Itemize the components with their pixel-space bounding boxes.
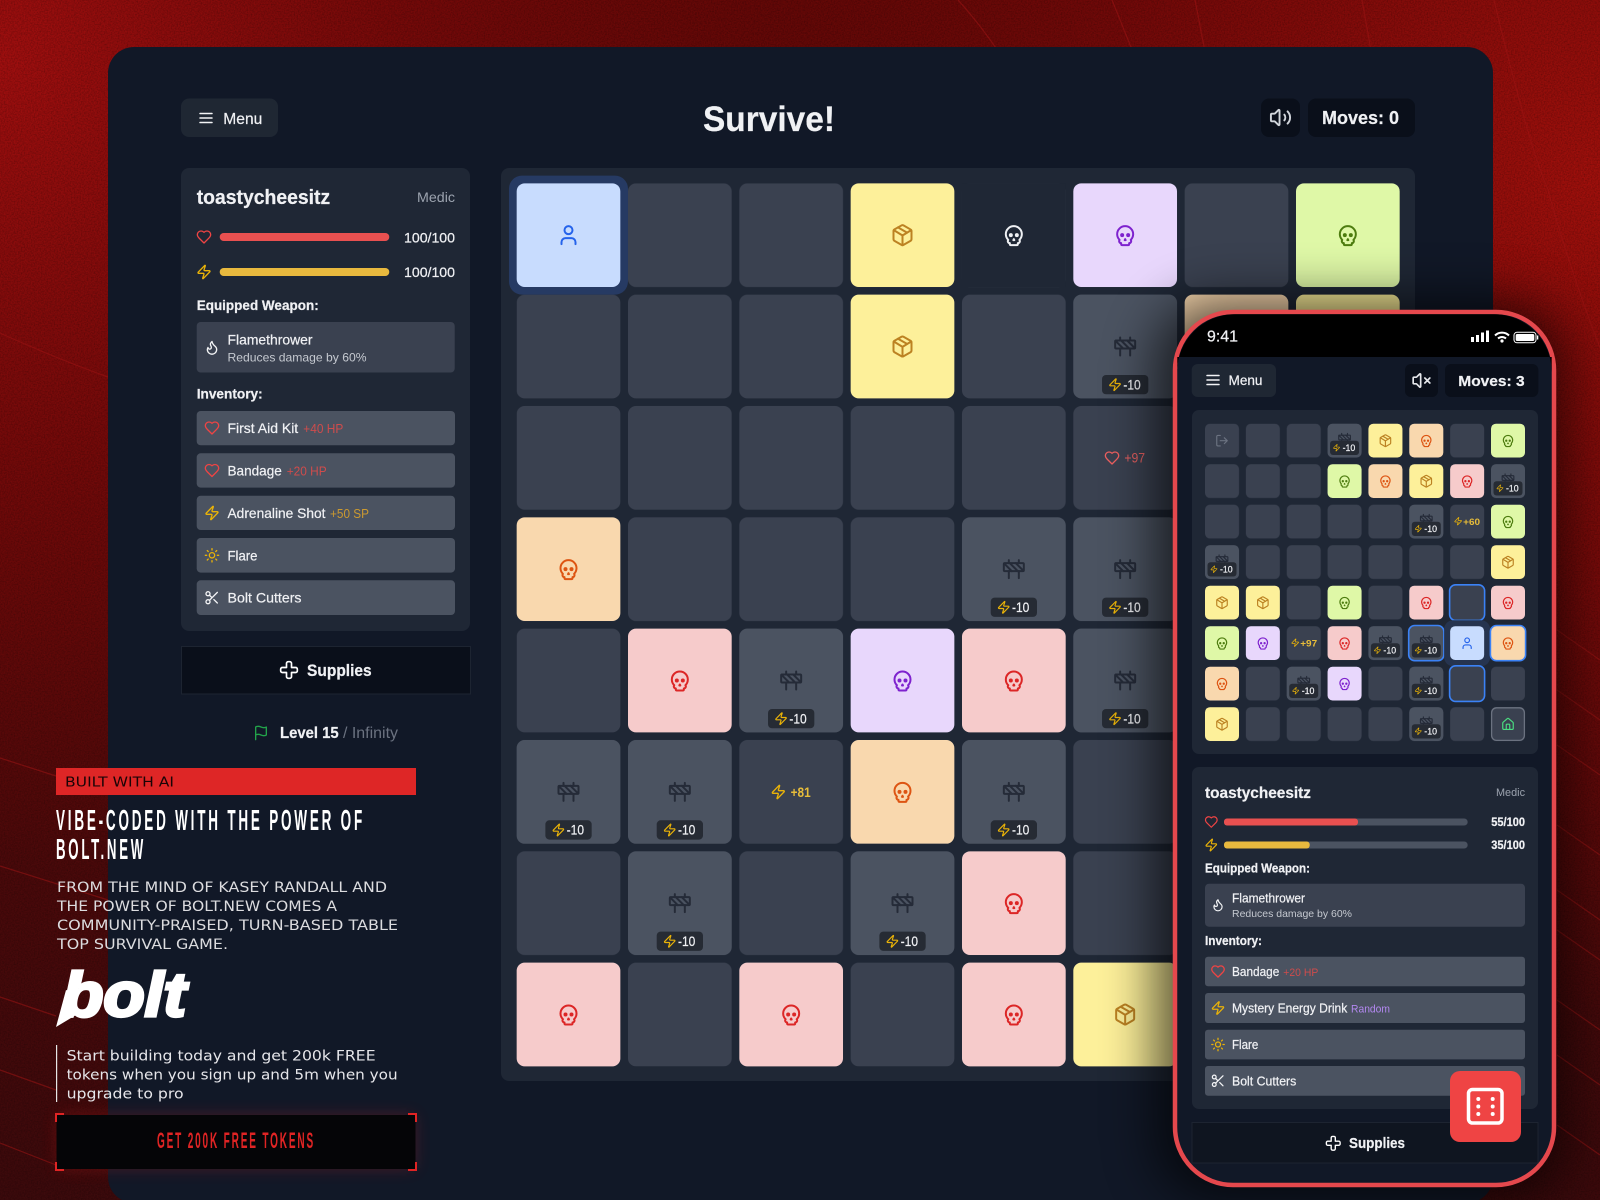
barrier tile: -10 xyxy=(1012,822,1029,838)
inventory item: adrenaline shot: Adrenaline Shot xyxy=(228,505,326,521)
barrier tile: -10 xyxy=(1012,599,1029,615)
phone moves counter: Moves: 3 xyxy=(1458,373,1525,390)
promo offer text xyxy=(56,1045,398,1103)
barrier tile: -10 xyxy=(678,933,695,949)
panel: game board xyxy=(501,168,1415,1081)
empty tiles grid xyxy=(517,183,1400,1066)
barrier tile: -10 xyxy=(901,933,918,949)
barrier tile xyxy=(517,740,620,844)
orange skull tile with move outline xyxy=(1490,626,1526,661)
inventory item: bandage: Bandage xyxy=(228,462,282,478)
bolt logo: bolt xyxy=(62,961,189,1030)
phone moves counter xyxy=(1445,364,1538,397)
phone weapon heading: Equipped Weapon: xyxy=(1205,862,1310,876)
purple skull tile xyxy=(851,629,954,732)
menu button xyxy=(181,98,278,137)
phone supplies button xyxy=(1192,1122,1538,1163)
purple skull tile xyxy=(1328,667,1362,700)
orange skull tile xyxy=(1185,295,1288,398)
phone weapon card xyxy=(1205,884,1525,927)
energy pickup tile: +97 xyxy=(1300,639,1317,649)
orange skull tile xyxy=(1368,464,1402,498)
health bar xyxy=(197,230,455,246)
phone item: mystery energy drink xyxy=(1205,993,1525,1023)
barrier tile xyxy=(1287,667,1321,700)
phone energy bar xyxy=(1206,839,1525,852)
energy pickup tile: +60 xyxy=(1463,517,1480,527)
inventory item: bolt cutters: Bolt Cutters xyxy=(228,590,302,606)
phone supplies button: Supplies xyxy=(1349,1136,1405,1152)
barrier tile: -10 xyxy=(1424,524,1437,535)
panel: player stats sidebar xyxy=(181,168,470,631)
phone status bar: 9:41 xyxy=(1207,329,1238,346)
inventory item: first aid kit: First Aid Kit xyxy=(228,420,298,436)
phone player name: toastycheesitz xyxy=(1205,785,1311,802)
crate tile xyxy=(1491,545,1525,579)
red skull tile xyxy=(517,963,620,1066)
barrier tile: -10 xyxy=(1506,484,1519,495)
barrier tile xyxy=(1205,545,1239,579)
inventory item: bolt cutters xyxy=(197,580,455,615)
promo description: COMMUNITY-PRAISED, TURN-BASED TABLE xyxy=(57,918,398,934)
phone health bar xyxy=(1205,817,1525,829)
barrier tile xyxy=(1328,424,1362,458)
call to action button xyxy=(56,1114,416,1170)
barrier tile: -10 xyxy=(1424,727,1437,738)
weapon card: flamethrower: Reduces damage by 60% xyxy=(228,351,367,365)
green skull tile xyxy=(1328,586,1362,620)
promo heading: BOLT.NEW xyxy=(56,834,146,866)
phone item: flare xyxy=(1205,1030,1525,1059)
supplies button xyxy=(182,646,470,694)
red skull tile xyxy=(962,963,1066,1066)
supply crate tile xyxy=(851,183,954,287)
phone item: flare: Flare xyxy=(1232,1038,1258,1052)
phone shadow xyxy=(1155,300,1565,1200)
barrier tile: -10 xyxy=(1123,599,1141,615)
barrier tile xyxy=(628,740,732,844)
health bar: 100/100 xyxy=(404,230,455,246)
purple skull tile xyxy=(1246,626,1280,660)
promo description xyxy=(56,880,398,953)
movable tile outline xyxy=(1450,666,1485,701)
text: VIBE-CODED WITH THE POWER OF xyxy=(56,805,365,837)
green skull tile xyxy=(1205,626,1239,660)
promo offer text: Start building today and get 200k FREE xyxy=(67,1049,376,1065)
panel: phone mockup xyxy=(1175,312,1554,1185)
green skull tile xyxy=(1491,424,1525,458)
inventory heading: Inventory: xyxy=(197,385,263,401)
phone player tile xyxy=(1444,620,1490,666)
moves counter xyxy=(1308,98,1415,137)
energy bar xyxy=(198,264,455,280)
barrier tile xyxy=(962,517,1066,621)
red skull tile xyxy=(962,851,1066,955)
phone inventory heading: Inventory: xyxy=(1205,934,1262,948)
movable tile outline xyxy=(1450,585,1485,620)
inventory item: bandage xyxy=(197,453,455,488)
home exit tile xyxy=(1492,708,1524,740)
equipped weapon heading: Equipped Weapon: xyxy=(197,297,319,313)
weapon card: flamethrower: Flamethrower xyxy=(228,331,313,347)
level indicator xyxy=(256,725,398,742)
phone item: bandage: Bandage xyxy=(1232,965,1279,979)
green skull tile xyxy=(1296,183,1400,287)
barrier tile xyxy=(1073,517,1177,621)
orange skull tile xyxy=(851,740,954,844)
inventory item: flare: Flare xyxy=(228,547,258,563)
level indicator: / Infinity xyxy=(343,725,398,742)
barrier tile xyxy=(962,740,1066,844)
call to action button: GET 200K FREE TOKENS xyxy=(157,1128,315,1153)
barrier tile: -10 xyxy=(1123,710,1141,726)
phone status bar xyxy=(1177,314,1552,372)
red skull tile xyxy=(1491,586,1525,620)
player name: toastycheesitz xyxy=(197,187,330,209)
phone item: bandage: +20 HP xyxy=(1283,967,1318,979)
health pickup tile: +97 xyxy=(1124,449,1145,465)
barrier tile: -10 xyxy=(1343,443,1355,454)
weapon card: flamethrower xyxy=(197,322,455,372)
phone player class: Medic xyxy=(1496,787,1525,799)
barrier tile xyxy=(1491,464,1525,498)
red skull tile xyxy=(962,629,1066,732)
supply crate tile xyxy=(851,295,954,398)
supplies button: Supplies xyxy=(307,661,372,680)
phone health bar: 55/100 xyxy=(1491,817,1525,829)
inventory item: first aid kit xyxy=(197,411,455,445)
crate tile xyxy=(1368,424,1402,458)
supply crate tile xyxy=(1073,963,1177,1066)
phone item: mystery energy drink: Random xyxy=(1351,1004,1390,1016)
orange skull tile xyxy=(1409,424,1443,458)
barrier tile: -10 xyxy=(678,822,695,838)
phone item: mystery energy drink: Mystery Energy Drink xyxy=(1232,1002,1348,1016)
promo heading xyxy=(56,805,365,866)
crate tile xyxy=(1205,586,1239,620)
barrier tile xyxy=(1368,626,1402,660)
barrier tile xyxy=(1073,295,1177,398)
energy pickup tile xyxy=(772,784,811,800)
barrier tile: -10 xyxy=(1424,686,1437,697)
barrier tile: -10 xyxy=(567,822,584,838)
barrier tile with move outline xyxy=(1409,626,1444,661)
energy pickup tile xyxy=(1292,639,1317,649)
clear tile: white skull xyxy=(962,183,1066,287)
phone empty tiles xyxy=(1205,424,1525,742)
inventory item: adrenaline shot: +50 SP xyxy=(330,507,369,521)
phone mute button xyxy=(1405,364,1438,397)
red skull tile xyxy=(628,629,732,732)
crate tile xyxy=(1246,586,1280,620)
exit tile xyxy=(1217,435,1227,446)
purple skull tile xyxy=(1073,183,1177,287)
red skull tile xyxy=(739,963,843,1066)
green skull tile xyxy=(1491,505,1525,538)
barrier tile: -10 xyxy=(1220,565,1233,576)
crate tile xyxy=(1409,464,1443,498)
barrier tile xyxy=(851,851,954,955)
barrier tile with move outline: -10 xyxy=(1424,646,1437,657)
inventory item: bandage: +20 HP xyxy=(287,464,327,478)
promo offer text: tokens when you sign up and 5m when you xyxy=(67,1068,398,1084)
inventory item: first aid kit: +40 HP xyxy=(303,422,343,436)
red skull tile xyxy=(1450,464,1484,498)
barrier tile: -10 xyxy=(789,710,807,726)
menu button: Menu xyxy=(223,111,262,128)
promo: built with AI banner: BUILT WITH AI xyxy=(65,775,174,791)
orange skull tile xyxy=(1205,667,1239,700)
inventory item: flare xyxy=(197,538,455,573)
phone item: bolt cutters: Bolt Cutters xyxy=(1232,1074,1296,1088)
phone weapon card: Reduces damage by 60% xyxy=(1232,908,1352,920)
energy pickup tile xyxy=(1455,517,1480,527)
crate tile xyxy=(1205,707,1239,741)
promo: built with AI banner xyxy=(56,768,416,795)
health pickup tile xyxy=(1105,449,1145,465)
barrier tile: -10 xyxy=(1123,376,1141,392)
green skull tile xyxy=(1328,464,1362,498)
red skull tile xyxy=(1328,626,1362,660)
title: Survive! xyxy=(703,100,835,139)
promo offer text: upgrade to pro xyxy=(67,1087,184,1103)
promo description: THE POWER OF BOLT.NEW COMES A xyxy=(56,899,337,915)
phone player panel xyxy=(1192,767,1538,1109)
player class: Medic xyxy=(417,189,455,205)
barrier tile xyxy=(1409,707,1443,741)
supply crate tile xyxy=(1296,295,1400,398)
sound button xyxy=(1261,98,1300,137)
barrier tile xyxy=(1409,667,1443,700)
moves counter: Moves: 0 xyxy=(1322,108,1399,128)
phone item: bandage xyxy=(1205,957,1525,986)
barrier tile xyxy=(1409,505,1443,538)
phone menu button: Menu xyxy=(1228,372,1262,388)
promo description: TOP SURVIVAL GAME. xyxy=(56,937,228,953)
energy bar: 100/100 xyxy=(404,264,455,280)
barrier tile xyxy=(1073,629,1177,732)
promo description: FROM THE MIND OF KASEY RANDALL AND xyxy=(57,880,387,896)
phone game board xyxy=(1192,410,1538,754)
dice roll button xyxy=(1450,1071,1521,1142)
barrier tile xyxy=(739,629,843,732)
level indicator: Level 15 xyxy=(280,725,339,742)
barrier tile: -10 xyxy=(1383,646,1396,657)
phone weapon card: Flamethrower xyxy=(1232,892,1305,906)
energy pickup tile: +81 xyxy=(791,784,811,800)
phone menu button xyxy=(1192,364,1276,397)
barrier tile: -10 xyxy=(1302,686,1314,697)
red skull tile xyxy=(1409,586,1443,620)
player tile xyxy=(509,176,628,295)
phone energy bar: 35/100 xyxy=(1491,840,1525,852)
barrier tile xyxy=(628,851,732,955)
inventory item: adrenaline shot xyxy=(197,496,455,530)
phone item: bolt cutters xyxy=(1205,1066,1525,1096)
orange skull tile xyxy=(517,517,620,621)
